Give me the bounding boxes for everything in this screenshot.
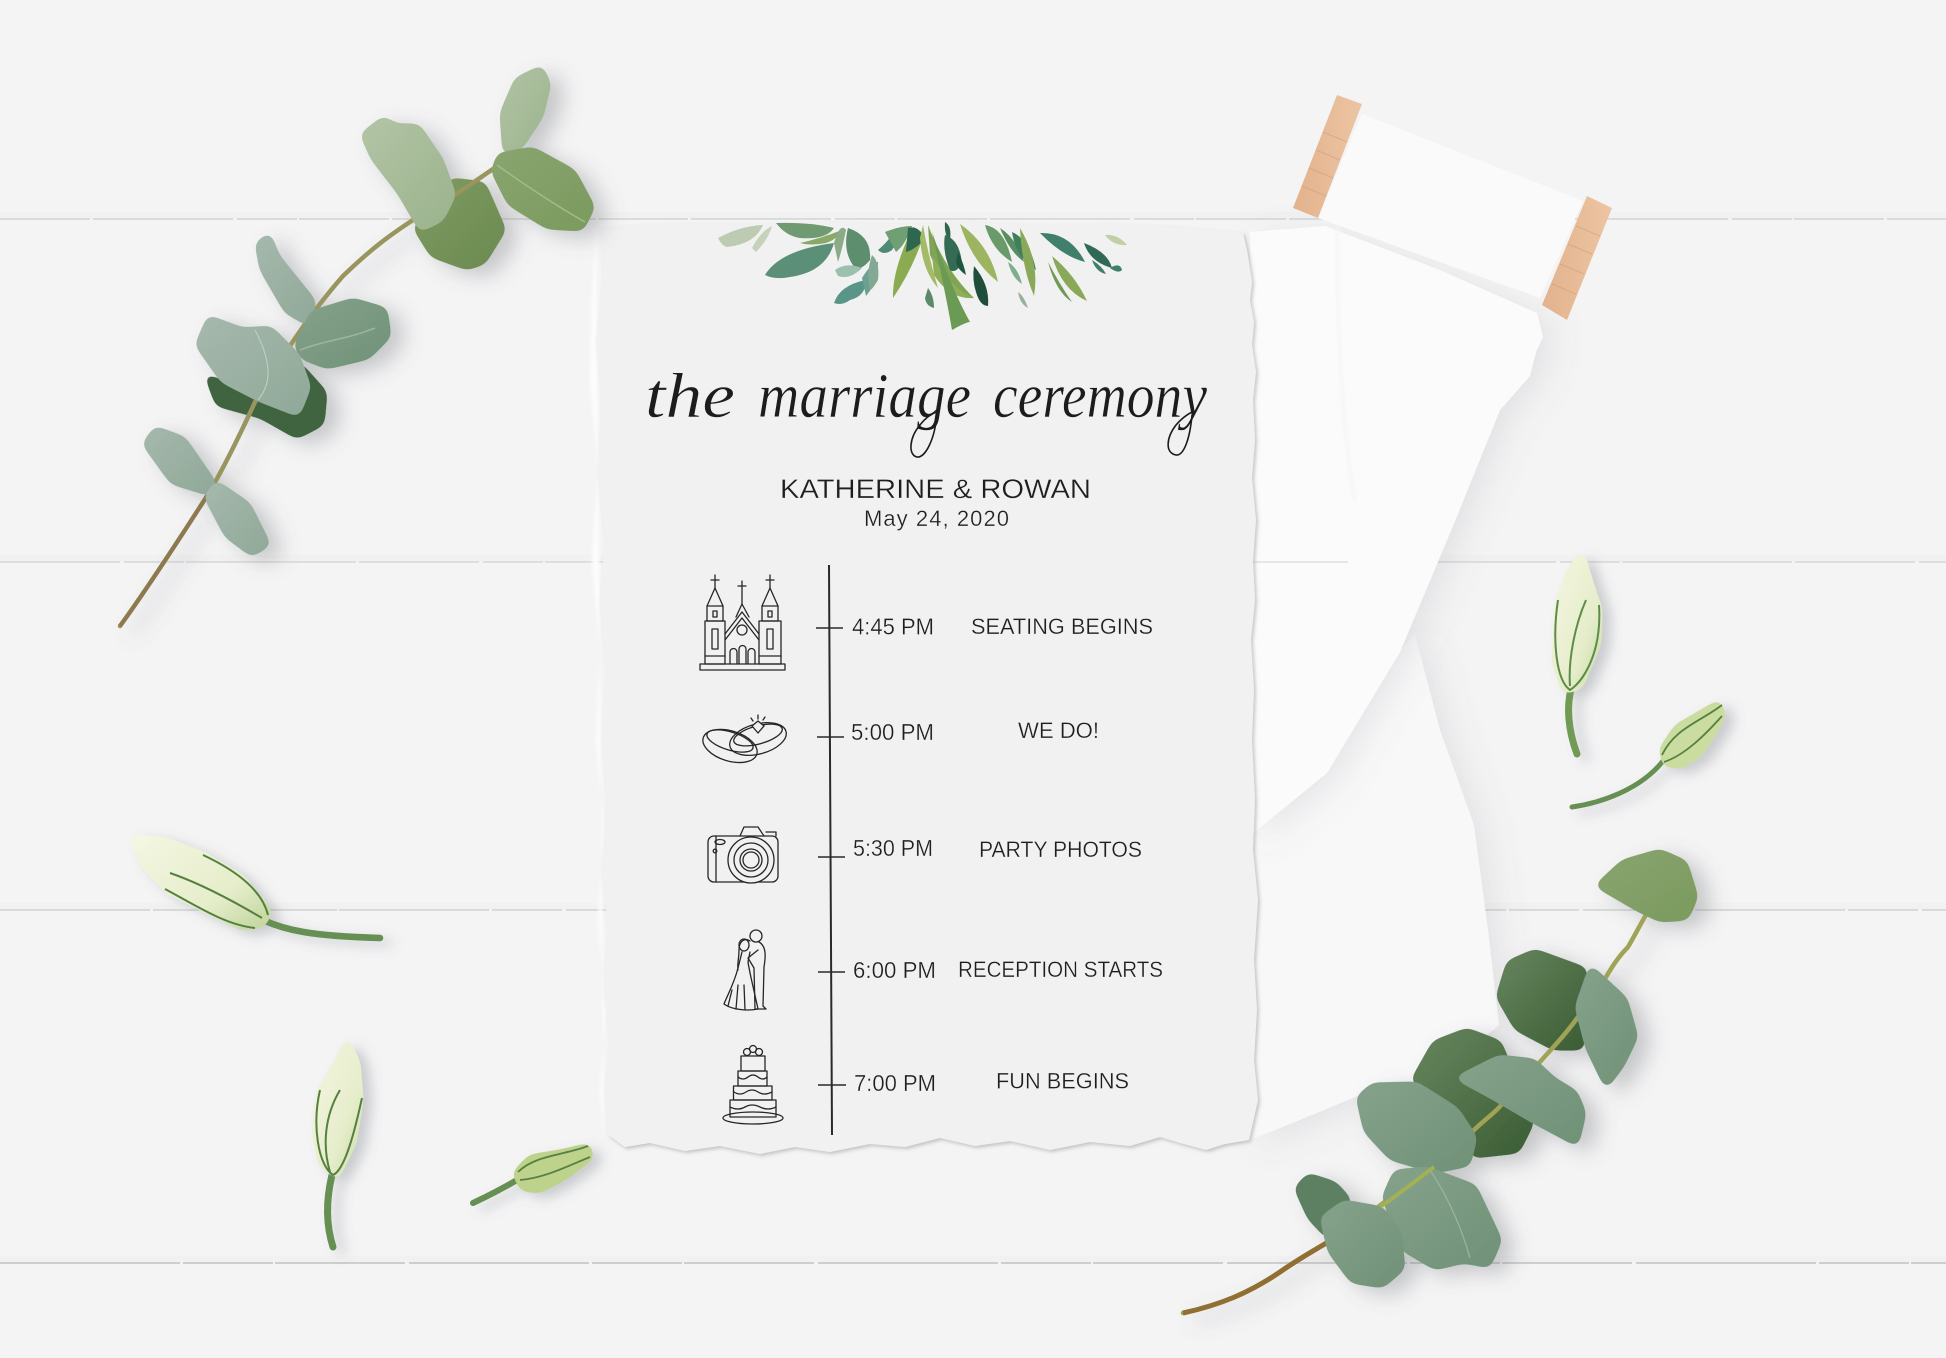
flower bud: left: [128, 834, 380, 938]
spool: right wood end: [1542, 196, 1612, 320]
time: 4:45 PM: [852, 614, 934, 640]
spool: left wood end: [1293, 95, 1362, 218]
paper card with deckled edge: [590, 222, 1258, 1154]
spool: ribbon roll: [1318, 114, 1583, 298]
title: the marriage ceremony: [645, 360, 1208, 457]
title: the marriage ceremony: marriage: [758, 360, 971, 431]
icon: wedding rings: [699, 715, 790, 769]
eucalyptus sprig: top left: [120, 65, 595, 626]
label: SEATING BEGINS: [971, 614, 1153, 639]
title: the marriage ceremony: ceremony: [993, 360, 1208, 431]
icon: wedding cake: [723, 1046, 783, 1124]
icon: church: [700, 575, 785, 670]
label: FUN BEGINS: [996, 1068, 1129, 1094]
time: 6:00 PM: [853, 957, 936, 983]
flower bud: right upper: [1552, 549, 1602, 754]
title: the marriage ceremony: the: [645, 360, 735, 431]
time: 7:00 PM: [854, 1070, 936, 1096]
watercolor greenery at the top of the card: [718, 222, 1127, 330]
silk ribbon: upper fold: [1250, 226, 1543, 836]
row: seating begins: [700, 575, 1153, 670]
row: party photos: [708, 827, 1142, 883]
time: 5:00 PM: [851, 719, 934, 745]
silk ribbon: lower fold: [1250, 635, 1499, 1140]
flower bud: right lower: [1572, 699, 1726, 807]
eucalyptus sprig: bottom right: [1183, 849, 1698, 1313]
label: PARTY PHOTOS: [979, 837, 1142, 862]
icon: camera: [708, 827, 778, 883]
time: 5:30 PM: [853, 835, 933, 861]
row: fun begins: [723, 1046, 1129, 1124]
timeline: vertical line and ticks: [816, 565, 846, 1135]
row: we do: [699, 715, 1099, 769]
icon: bride and groom: [724, 930, 766, 1010]
date: May 24, 2020: [864, 506, 1009, 531]
flower bud: small bottom: [473, 1143, 594, 1203]
label: WE DO!: [1018, 718, 1099, 743]
ribbon spool: [1293, 95, 1612, 320]
flower bud: center bottom: [312, 1036, 363, 1247]
names heading: KATHERINE & ROWAN: [780, 474, 1091, 504]
row: reception starts: [724, 930, 1163, 1010]
label: RECEPTION STARTS: [958, 957, 1163, 982]
